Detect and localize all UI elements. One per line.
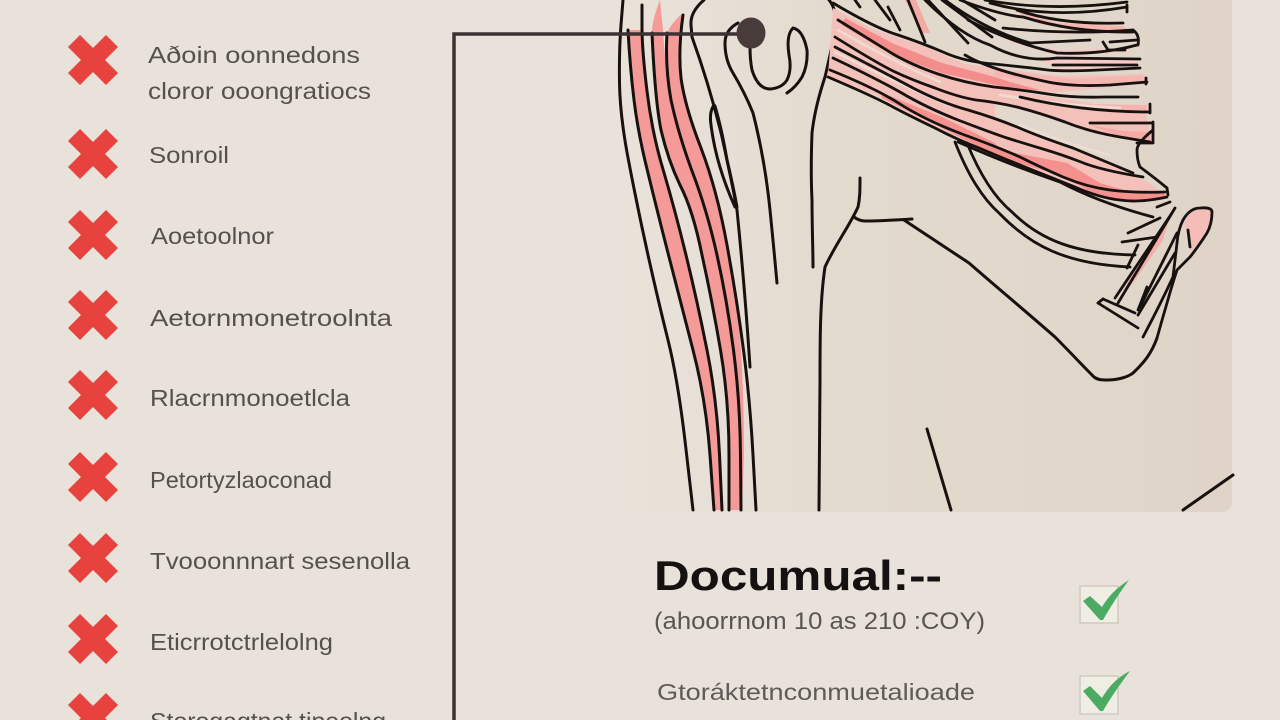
item 4 (74, 296, 392, 334)
item 1 text: Aðoin oonnedons (148, 42, 360, 68)
list: cross items (74, 41, 410, 720)
icon: red cross (74, 135, 112, 173)
leg outlines (619, 0, 1233, 510)
icon: green check 2 (1080, 671, 1130, 714)
item 2 text: Sonroil (149, 142, 229, 168)
item 6 text: Petortyzlaoconad (150, 467, 332, 493)
item 6 (74, 458, 332, 496)
pink finger (1123, 217, 1170, 290)
pink muscle fills (828, 0, 1167, 203)
item 1 second line: cloror ooongratiocs (148, 78, 371, 104)
item 8 (74, 620, 333, 658)
item 4 text: Aetornmonetroolnta (150, 305, 392, 331)
item 5 (74, 376, 350, 414)
leader line to joint (454, 34, 738, 720)
panel: anatomy illustration (600, 0, 1233, 512)
icon: red cross (74, 620, 112, 658)
icon: red cross (74, 296, 112, 334)
black strand lines (828, 0, 1167, 217)
thumb fill (1184, 209, 1211, 252)
heading: Documual:-- (654, 552, 942, 599)
icon: green check 1 (1080, 580, 1129, 623)
item 9 (74, 699, 386, 720)
icon: red cross (74, 458, 112, 496)
description line: Gtoráktetnconmuetalioade (657, 679, 975, 705)
illustration background (600, 0, 1232, 512)
icon: red cross (74, 41, 112, 79)
item 8 text: Eticrrotctrlelolng (150, 629, 333, 655)
leg muscle fills (628, 0, 744, 510)
thumb outline (1157, 208, 1212, 338)
icon: red cross (74, 216, 112, 254)
joint marker dot (736, 18, 766, 48)
pale gaps between strands (835, 30, 1120, 155)
item 2 (74, 135, 229, 173)
icon: red cross (74, 376, 112, 414)
item 7 text: Tvooonnnart sesenolla (150, 548, 410, 574)
item 1 (74, 41, 360, 79)
arm and hand (955, 130, 1212, 338)
subheading: (ahoorrnom 10 as 210 :COY) (654, 608, 985, 635)
icon: red cross (74, 699, 112, 720)
item 7 (74, 539, 410, 577)
icon: red cross (74, 539, 112, 577)
item 3 (74, 216, 274, 254)
shoulder muscle fan (828, 0, 1167, 217)
item 3 text: Aoetoolnor (151, 223, 274, 249)
item 5 text: Rlacrnmonoetlcla (150, 385, 350, 411)
